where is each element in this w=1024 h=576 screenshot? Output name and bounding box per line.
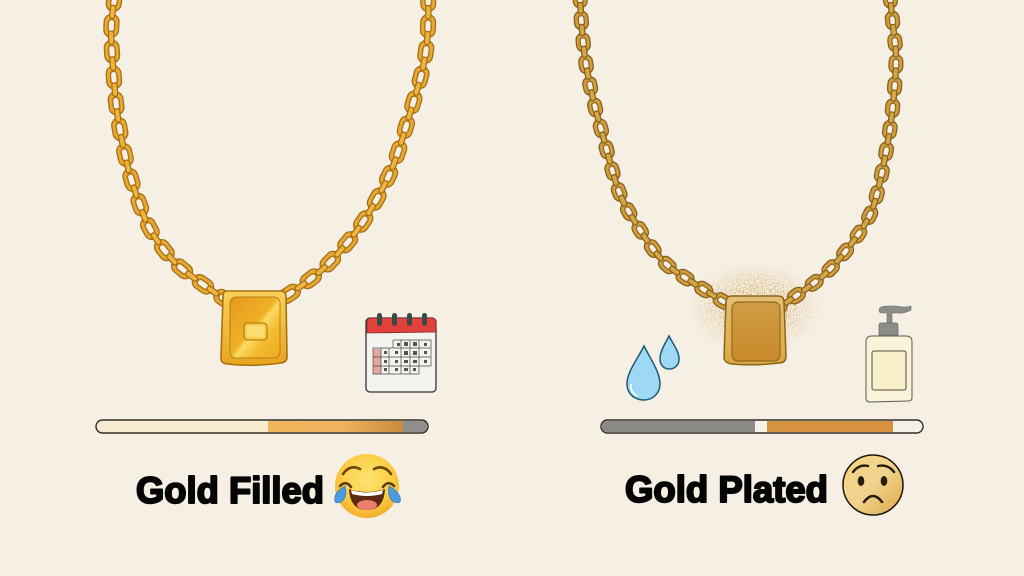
icon: laughing emoji bbox=[335, 454, 400, 518]
icon: sad emoji bbox=[843, 455, 903, 515]
panel: gold filled bbox=[96, 0, 436, 518]
heading: gold plated: Gold Plated bbox=[625, 469, 828, 510]
pendant: gold filled bbox=[221, 291, 287, 365]
icon: water drops bbox=[627, 336, 679, 400]
icon: calendar bbox=[366, 313, 436, 392]
necklace chain: gold filled bbox=[111, 0, 428, 304]
heading: gold filled: Gold Filled bbox=[136, 470, 324, 511]
necklace chain: gold plated bbox=[580, 0, 896, 310]
icon: lotion bottle bbox=[866, 306, 912, 402]
wear bar: gold plated bbox=[601, 420, 923, 433]
pendant: gold plated bbox=[724, 296, 786, 365]
gold dust around pendant bbox=[689, 262, 821, 354]
panel: gold plated bbox=[580, 0, 923, 515]
durability bar: gold filled bbox=[96, 420, 428, 433]
